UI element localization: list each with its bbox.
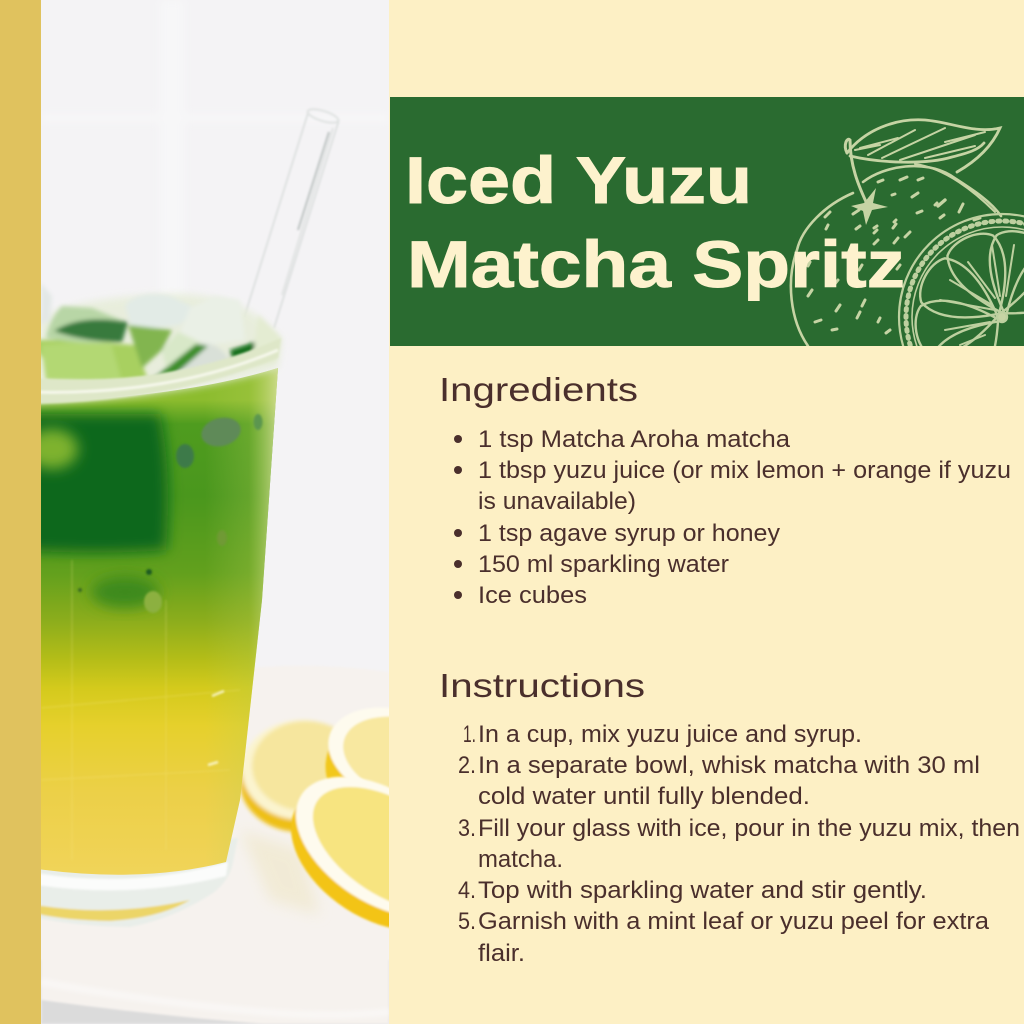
title banner [390, 97, 1024, 346]
calyx star [851, 188, 888, 225]
layered liquid [41, 368, 278, 875]
instructions list: 2. [458, 752, 476, 779]
instructions list: In a separate bowl, whisk matcha with 30 ml [478, 752, 980, 779]
ingredients list: 150 ml sparkling water [478, 551, 729, 578]
instructions list: 3. [458, 815, 476, 842]
leaf and stem [845, 120, 1000, 206]
banner background [390, 97, 1024, 346]
ingredients list: 1 tbsp yuzu juice (or mix lemon + orange if yuzu [478, 457, 1011, 484]
ingredients list: 1 tsp Matcha Aroha matcha [478, 426, 791, 453]
instructions list: Garnish with a mint leaf or yuzu peel for extra [478, 908, 990, 935]
instructions list: Fill your glass with ice, pour in the yuzu mix, then [478, 815, 1020, 842]
fruit outline [791, 193, 853, 346]
glass rim band [30, 338, 281, 404]
instructions list: 5. [458, 908, 476, 935]
title: Iced Yuzu [405, 143, 752, 217]
instructions list: matcha. [478, 846, 563, 873]
wall tile grout [41, 0, 389, 300]
fruit skin pores [808, 177, 980, 333]
middle slice [324, 709, 389, 789]
lemon slices [240, 709, 389, 930]
plate shadows [240, 830, 320, 915]
white plate [41, 960, 389, 1024]
heading: ingredients: Ingredients [439, 372, 638, 409]
left accent bar [0, 0, 41, 1024]
glass rim and ice cubes [30, 283, 282, 404]
instructions list [458, 721, 1020, 967]
photo: iced matcha drink on plate with lemon slices [41, 0, 389, 1024]
instructions list: Top with sparkling water and stir gently. [478, 877, 927, 904]
citrus slice [898, 212, 1024, 346]
heading: instructions: Instructions [439, 668, 645, 705]
title [405, 143, 905, 301]
glass base [30, 838, 238, 927]
citrus line illustration [790, 118, 1024, 346]
instructions list: 1. [463, 721, 476, 748]
title: Matcha Spritz [407, 227, 905, 301]
photo backdrop [41, 0, 389, 1024]
ingredients list [454, 426, 1011, 609]
instructions list: flair. [478, 940, 525, 967]
instructions list: In a cup, mix yuzu juice and syrup. [478, 721, 862, 748]
front slice [290, 775, 389, 930]
ice and matcha foam [30, 283, 281, 382]
ingredients list: 1 tsp agave syrup or honey [478, 520, 780, 547]
instructions list: 4. [458, 877, 476, 904]
glass straw [244, 107, 340, 328]
instructions list: cold water until fully blended. [478, 783, 810, 810]
ingredients list: Ice cubes [478, 582, 587, 609]
back slice [240, 718, 334, 835]
ingredients list: is unavailable) [478, 488, 636, 515]
rim haze [30, 294, 282, 404]
